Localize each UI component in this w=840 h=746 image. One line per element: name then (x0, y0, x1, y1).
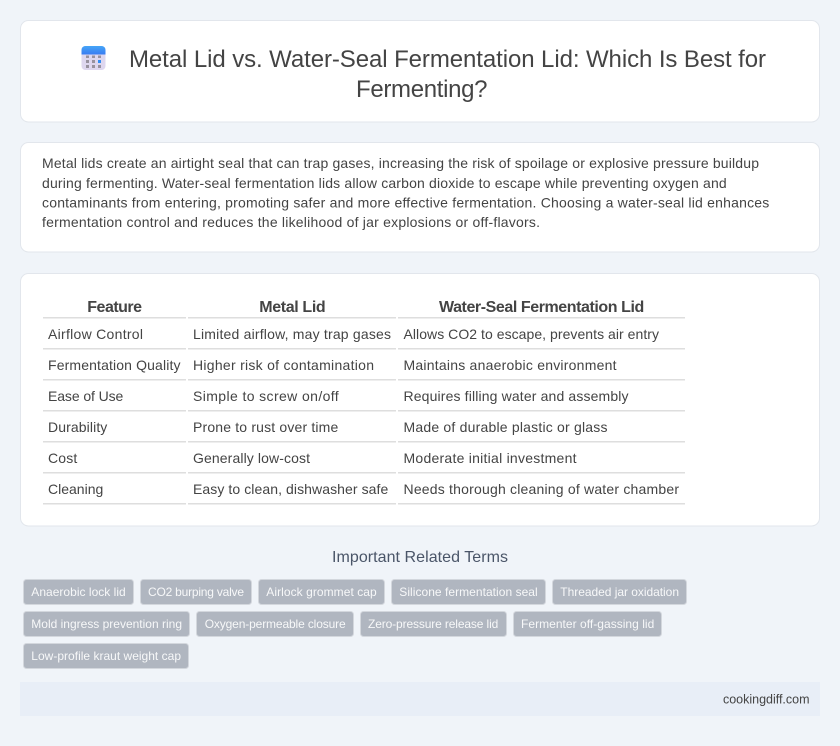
header card (20, 20, 820, 122)
related terms tags: Mold ingress prevention ring (31, 617, 182, 631)
row: airflow control: Limited airflow, may trap gases (193, 326, 391, 342)
related terms heading: Important Related Terms (332, 549, 508, 566)
footer bar (20, 682, 820, 716)
related terms tags: Threaded jar oxidation (560, 585, 679, 599)
table header row: Feature (87, 299, 142, 316)
intro paragraph: during fermenting. Water-seal fermentation lids allow carbon dioxide to escape while preventing oxygen and (42, 175, 727, 191)
related terms tags: Low-profile kraut weight cap (31, 649, 181, 663)
row: fermentation quality: Higher risk of contamination (193, 357, 374, 373)
row: durability: Durability (48, 419, 107, 435)
row: ease of use: Requires filling water and assembly (404, 388, 628, 404)
table header row (87, 299, 644, 316)
row: durability: Prone to rust over time (193, 419, 339, 435)
related terms tags: CO2 burping valve (148, 585, 244, 599)
row: airflow control: Allows CO2 to escape, prevents air entry (404, 326, 659, 342)
row: cost (48, 450, 577, 466)
row: ease of use: Simple to screw on/off (193, 388, 339, 404)
intro paragraph (42, 155, 769, 230)
row: ease of use (48, 388, 628, 404)
intro paragraph: fermentation control and reduces the likelihood of jar explosions or off-flavors. (42, 214, 540, 230)
intro paragraph: contaminants from entering, promoting safer and more effective fermentation. Choosing a water-seal lid enhances (42, 194, 769, 210)
comparison table panel (20, 274, 820, 526)
row: fermentation quality: Maintains anaerobic environment (404, 357, 617, 373)
row: cleaning: Cleaning (48, 481, 103, 497)
related terms tags: Fermenter off-gassing lid (521, 617, 654, 631)
row: fermentation quality: Fermentation Quality (48, 357, 180, 373)
row: cost: Moderate initial investment (404, 450, 577, 466)
related terms tags: Oxygen-permeable closure (205, 617, 346, 631)
row: cleaning: Easy to clean, dishwasher safe (193, 481, 389, 497)
row: durability (48, 419, 608, 435)
row: fermentation quality (48, 357, 617, 373)
related terms tags: Zero-pressure release lid (368, 617, 498, 631)
intro paragraph: Metal lids create an airtight seal that can trap gases, increasing the risk of spoilage or explosive pressure buildup (42, 155, 759, 171)
title (129, 46, 766, 103)
row: cost: Cost (48, 450, 77, 466)
table header row: Metal Lid (259, 299, 326, 316)
related terms tags: Anaerobic lock lid (31, 585, 126, 599)
related terms tags (24, 580, 686, 668)
row: airflow control: Airflow Control (48, 326, 143, 342)
table header row: Water-Seal Fermentation Lid (439, 299, 644, 316)
row: cleaning (48, 481, 679, 497)
icon: calendar (82, 46, 106, 70)
row: cleaning: Needs thorough cleaning of water chamber (404, 481, 679, 497)
row: cost: Generally low-cost (193, 450, 310, 466)
intro text panel (20, 142, 820, 252)
title: Fermenting? (356, 76, 488, 103)
row: ease of use: Ease of Use (48, 388, 124, 404)
row: durability: Made of durable plastic or glass (404, 419, 608, 435)
title: Metal Lid vs. Water-Seal Fermentation Lid: Which Is Best for (129, 46, 766, 73)
related terms tags: Airlock grommet cap (266, 585, 377, 599)
related terms tags: Silicone fermentation seal (399, 585, 538, 599)
footer site name: cookingdiff.com (723, 692, 810, 706)
row: airflow control (48, 326, 659, 342)
